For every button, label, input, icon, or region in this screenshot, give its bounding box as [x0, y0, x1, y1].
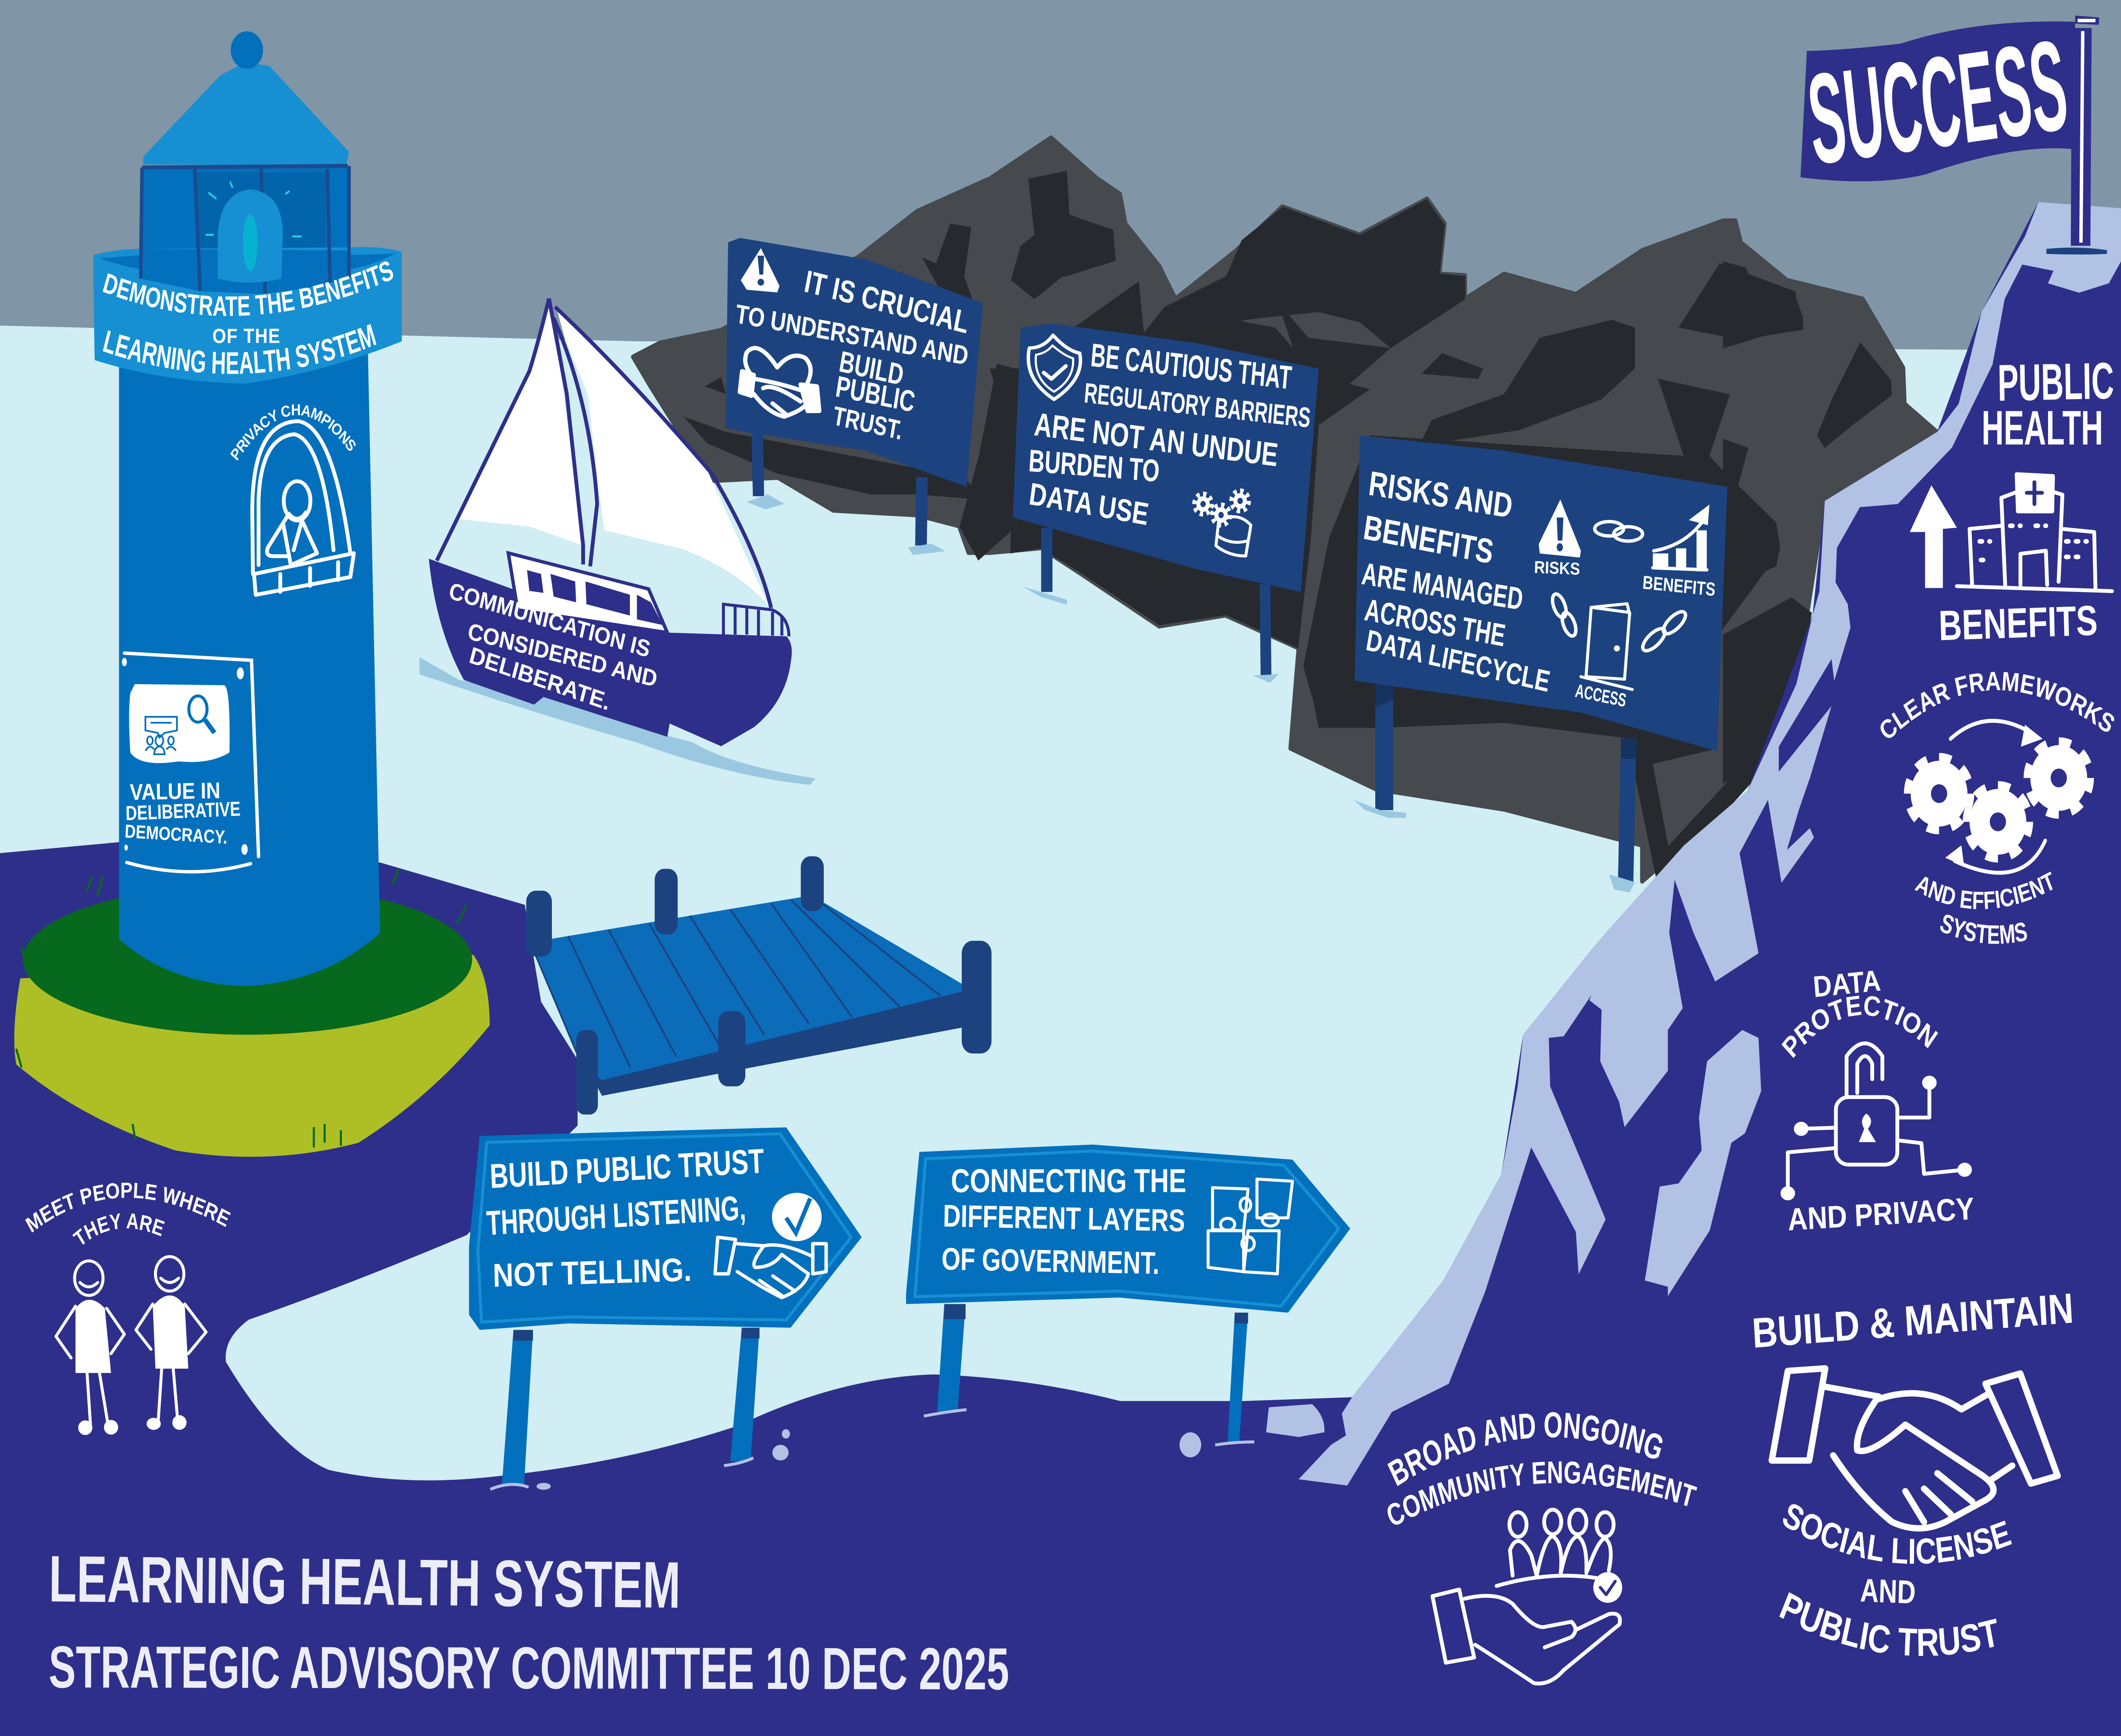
broad and ongoing community engagement — [1382, 1404, 1699, 1683]
data protection and privacy: DATA — [1812, 964, 1882, 1004]
icon: small gears — [1194, 491, 1249, 525]
sign: risks and benefits: BENEFITS — [1361, 508, 1496, 571]
boat label — [447, 577, 660, 715]
sign: risks and benefits: ACCESS — [1574, 680, 1628, 711]
sign: build public trust: NOT TELLING. — [492, 1251, 692, 1294]
sign: be cautious: DATA USE — [1027, 476, 1151, 532]
plaque: value in deliberative democracy: VALUE IN — [129, 777, 221, 805]
sign: connecting layers of government — [906, 1145, 1350, 1445]
clear frameworks and efficient systems — [1875, 666, 2119, 950]
meet people where they are — [22, 1178, 233, 1435]
sign: be cautious: REGULATORY BARRIERS — [1083, 377, 1312, 434]
sign: it is crucial — [726, 238, 983, 555]
data protection and privacy — [1777, 964, 1975, 1237]
broad and ongoing community engagement: BROAD AND ONGOING — [1383, 1404, 1668, 1494]
dock — [526, 856, 991, 1115]
icon: gears — [1908, 721, 2090, 873]
sign: be cautious: BE CAUTIOUS THAT — [1089, 337, 1293, 397]
lighthouse heading: DEMONSTRATE THE BENEFITS — [100, 254, 397, 322]
clear frameworks and efficient systems: CLEAR FRAMEWORKS — [1875, 666, 2119, 746]
broad and ongoing community engagement: COMMUNITY ENGAGEMENT — [1382, 1455, 1699, 1534]
icon: database — [1216, 517, 1251, 556]
sign: build public trust: THROUGH LISTENING, — [486, 1188, 747, 1243]
sign: risks and benefits: ACROSS THE — [1363, 592, 1508, 653]
lighthouse heading — [100, 254, 397, 381]
title: LEARNING HEALTH SYSTEM — [49, 1542, 681, 1622]
sign: risks and benefits — [1354, 435, 1727, 892]
sign: be cautious: BURDEN TO — [1028, 443, 1161, 489]
build and maintain social licence: SOCIAL LICENSE — [1777, 1494, 2015, 1572]
icon: shield with tick — [1028, 335, 1080, 400]
boat railing — [723, 604, 789, 636]
sign: build public trust: BUILD PUBLIC TRUST — [489, 1142, 765, 1196]
privacy champions window: PRIVACY CHAMPIONS — [228, 402, 359, 464]
public health benefits: PUBLIC — [1997, 352, 2114, 412]
public health benefits: HEALTH — [1982, 401, 2103, 455]
public health benefits — [1910, 352, 2114, 649]
sign: be cautious: ARE NOT AN UNDUE — [1033, 406, 1280, 473]
meet people where they are: MEET PEOPLE WHERE — [22, 1178, 233, 1238]
boat hull — [429, 559, 792, 746]
sign: build public trust — [469, 1127, 862, 1490]
sailing boat — [420, 299, 816, 785]
sign: risks and benefits: DATA LIFECYCLE — [1364, 623, 1553, 698]
privacy champions window — [228, 402, 359, 595]
plaque: value in deliberative democracy: DELIBERATIVE — [125, 797, 241, 825]
icon: handshake — [715, 1237, 826, 1297]
icon: heart and handshake — [740, 348, 819, 417]
sign: it is crucial: BUILD — [837, 345, 906, 391]
lighthouse tower — [119, 352, 380, 986]
icon: hand holding people — [1433, 1510, 1622, 1683]
icon: people speech bubble — [146, 717, 177, 754]
icon: padlock with circuit — [1782, 1043, 1970, 1199]
plaque: value in deliberative democracy — [122, 653, 259, 872]
lighthouse — [14, 31, 490, 1157]
boat label: DELIBERATE. — [467, 642, 613, 715]
build and maintain social licence: AND — [1860, 1572, 1916, 1611]
sign: be cautious — [1013, 323, 1319, 683]
public health benefits: BENEFITS — [1938, 597, 2098, 649]
icon: hospital — [1957, 474, 2112, 591]
sign: it is crucial: PUBLIC — [834, 370, 917, 418]
icon: two people — [56, 1257, 206, 1435]
island — [14, 869, 490, 1157]
icon: warning triangle — [741, 248, 780, 292]
icon: tick badge — [772, 1193, 822, 1241]
light bulb — [206, 182, 302, 281]
sign: connecting layers of government: CONNECTING THE — [951, 1163, 1186, 1199]
lighthouse heading: LEARNING HEALTH SYSTEM — [100, 317, 380, 381]
cliff lower slab — [1645, 1030, 1761, 1296]
gallery band — [93, 247, 402, 383]
sign: it is crucial: TO UNDERSTAND AND — [734, 299, 970, 371]
sign: risks and benefits: RISKS — [1534, 558, 1580, 579]
build and maintain social licence: BUILD & MAINTAIN — [1751, 1284, 2075, 1357]
boat label: COMMUNICATION IS — [447, 577, 653, 663]
background: sky — [0, 0, 2121, 360]
sign: risks and benefits: RISKS AND — [1367, 464, 1514, 526]
land: left and bottom shore — [0, 842, 1377, 1736]
data protection and privacy: AND PRIVACY — [1787, 1191, 1975, 1237]
lantern room — [141, 166, 349, 291]
land: right headland — [1298, 202, 2121, 1736]
build and maintain social licence — [1751, 1284, 2075, 1665]
sign: risks and benefits: BENEFITS — [1642, 572, 1716, 600]
title: STRATEGIC ADVISORY COMMITTEE 10 DEC 2025 — [49, 1633, 1009, 1702]
sign: it is crucial: IT IS CRUCIAL — [802, 264, 972, 340]
icon: risks triangle — [1539, 500, 1581, 557]
cliff face — [1298, 202, 2121, 1485]
plaque: value in deliberative democracy: DEMOCRACY. — [124, 821, 228, 848]
data protection and privacy: PROTECTION — [1777, 990, 1942, 1064]
sign: risks and benefits: ARE MANAGED — [1360, 556, 1525, 617]
sails — [437, 299, 771, 608]
success flag: SUCCESS — [1802, 13, 2073, 192]
success flag — [1800, 13, 2107, 254]
build and maintain social licence: PUBLIC TRUST — [1774, 1584, 2003, 1665]
icon: door — [1581, 604, 1632, 690]
lighthouse ball — [231, 31, 263, 69]
lighthouse roof — [143, 63, 349, 166]
sign: connecting layers of government: DIFFERENT LAYERS — [943, 1198, 1185, 1238]
sign: it is crucial: TRUST. — [831, 401, 905, 445]
rocky mountains — [633, 138, 1937, 887]
icon: handshake — [1772, 1368, 2058, 1528]
lighthouse heading: OF THE — [213, 324, 280, 347]
icon: benefits chart — [1653, 505, 1710, 571]
boat label: CONSIDERED AND — [466, 618, 660, 692]
clear frameworks and efficient systems: SYSTEMS — [1936, 908, 2029, 950]
title — [49, 1542, 1009, 1702]
boat shadow — [420, 657, 816, 785]
icon: magnifier — [189, 696, 214, 733]
icons: chain links — [1550, 522, 1689, 654]
sign: connecting layers of government: OF GOVERNMENT. — [941, 1241, 1160, 1281]
icon: up arrow — [1910, 485, 1957, 588]
icon: puzzle pieces — [1208, 1179, 1293, 1274]
clear frameworks and efficient systems: AND EFFICIENT — [1912, 867, 2059, 915]
meet people where they are: THEY ARE — [70, 1209, 167, 1252]
boat cabin — [508, 553, 667, 632]
shore rocks — [772, 1404, 1324, 1460]
